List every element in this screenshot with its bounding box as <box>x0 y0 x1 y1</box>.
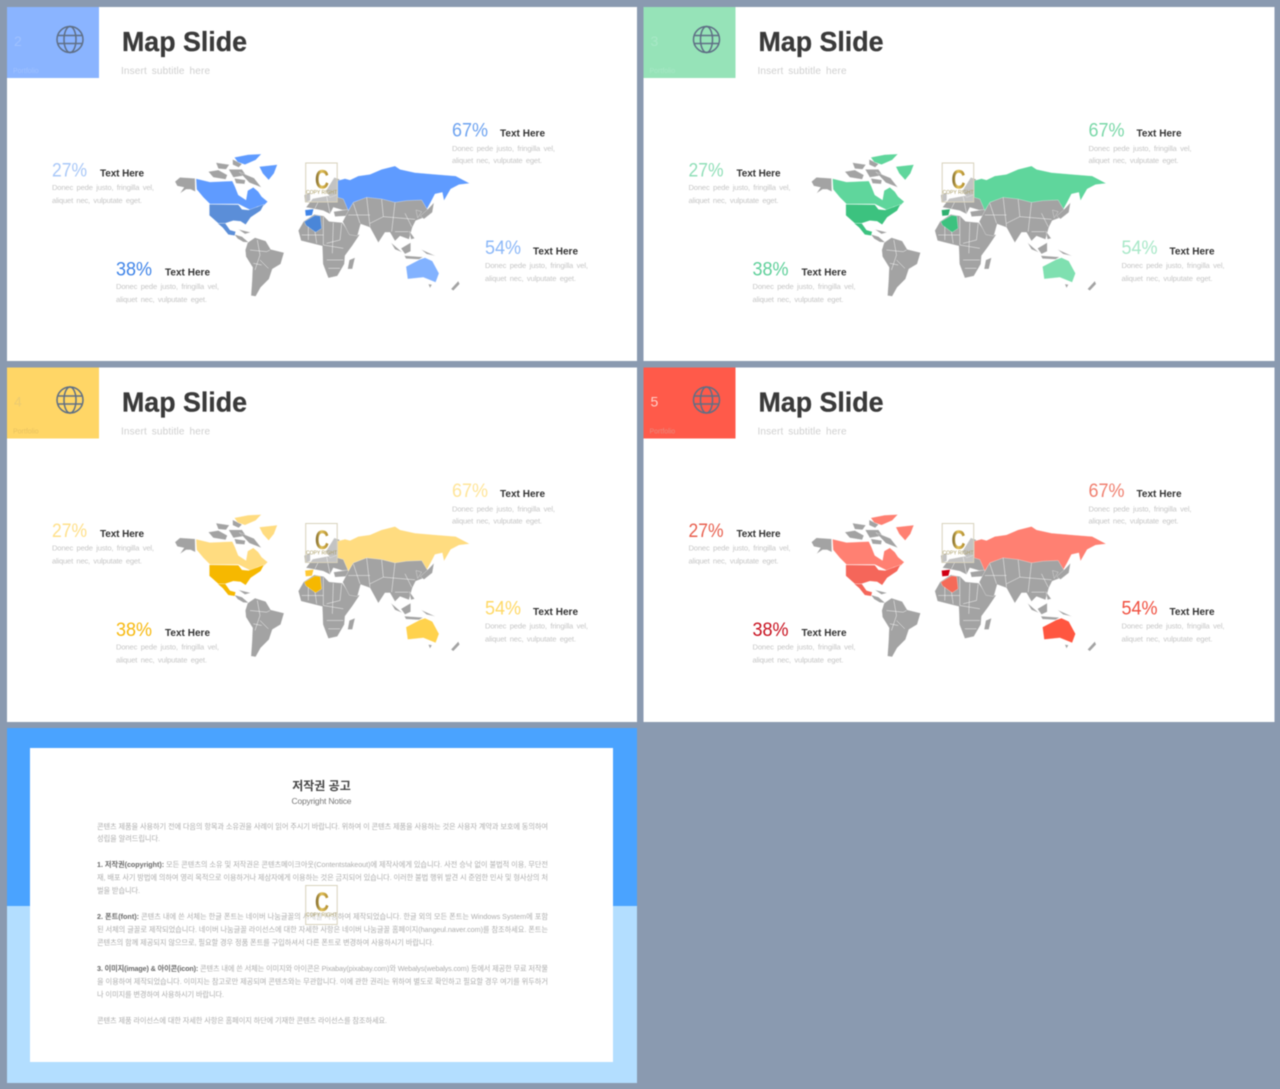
clause 3 image and icon: 3. 이미지(image) & 아이콘(icon): 콘텐츠 내에 쓴 서체는 이미지와 아이콘은 Pixabay(pixabay.com)와 Webalys(webalys.com) 등에서 제공한 무료 저작물 <box>97 964 548 973</box>
stat 54%: 54% <box>485 238 521 259</box>
stat 54%: aliquet nec, vulputate eget. <box>1122 634 1212 644</box>
subtitle: Insert subtitle here <box>121 66 210 77</box>
stat 67%: aliquet nec, vulputate eget. <box>452 516 542 526</box>
stat 38% <box>116 620 219 664</box>
stat 27%: Text Here <box>100 529 144 540</box>
stat 54% <box>1122 598 1224 644</box>
intro paragraph: 성립을 알려드립니다. <box>97 834 160 843</box>
stat 67%: Text Here <box>500 489 545 500</box>
copyright heading: 저작권 공고 <box>292 778 351 793</box>
header tab: 5 <box>650 394 658 410</box>
stat 67%: Donec pede justo, fringilla vel, <box>1088 504 1192 514</box>
stat 27% <box>688 521 790 566</box>
stat 27%: Text Here <box>736 168 781 180</box>
world map <box>175 154 470 296</box>
panel: copyright notice <box>7 728 637 1083</box>
stat 38%: Donec pede justo, fringilla vel, <box>752 282 856 291</box>
stat 27%: 27% <box>52 160 87 182</box>
stat 38%: Text Here <box>802 628 847 639</box>
stat 27%: 27% <box>688 521 724 542</box>
world map <box>811 514 1106 657</box>
subtitle: Insert subtitle here <box>758 426 847 438</box>
stat 54%: 54% <box>1122 598 1158 620</box>
world map <box>175 514 470 657</box>
panel: slide 4 yellow map <box>7 368 637 722</box>
stat 27% <box>52 521 154 566</box>
header tab <box>644 7 736 78</box>
stat 38% <box>752 620 856 664</box>
world map <box>811 154 1106 296</box>
stat 27%: 27% <box>688 160 724 182</box>
stat 27%: aliquet nec, vulputate eget. <box>52 556 142 566</box>
stat 54%: Donec pede justo, fringilla vel, <box>485 622 588 630</box>
clause 1 copyright: 1. 저작권(copyright): 모든 콘텐츠의 소유 및 저작권은 콘텐츠메이크아웃(Contentstakeout)에 제작사에게 있습니다. 사전 승낙 없이 불법적 이용, 무단전 <box>97 860 548 869</box>
watermark <box>306 524 337 562</box>
stat 67%: Text Here <box>1136 489 1182 500</box>
stat 38%: aliquet nec, vulputate eget. <box>752 295 844 304</box>
heading: Map Slide <box>758 386 884 418</box>
clause 3 image and icon: 나 이미지를 변경하여 사용하시기 바랍니다. <box>97 990 224 999</box>
stat 27%: aliquet nec, vulputate eget. <box>688 196 778 205</box>
intro paragraph <box>97 822 548 843</box>
icon: globe <box>57 26 83 52</box>
header tab: Portfolio <box>13 68 39 75</box>
stat 67%: Donec pede justo, fringilla vel, <box>1088 144 1192 153</box>
stat 67% <box>1088 120 1192 165</box>
watermark <box>942 524 974 562</box>
stat 54%: Donec pede justo, fringilla vel, <box>1122 261 1224 270</box>
header tab: Portfolio <box>650 428 675 436</box>
heading: Map Slide <box>122 26 247 57</box>
stat 38%: Text Here <box>165 268 210 278</box>
icon: globe <box>57 387 83 413</box>
watermark <box>942 163 974 202</box>
watermark <box>306 163 337 202</box>
header tab: 2 <box>14 33 22 49</box>
stat 67% <box>452 481 555 526</box>
stat 54%: Text Here <box>1170 246 1215 258</box>
header tab: 4 <box>14 394 22 410</box>
stat 38%: Text Here <box>802 268 847 278</box>
clause 1 copyright <box>97 860 548 895</box>
stat 38%: Text Here <box>165 628 210 639</box>
stat 67%: 67% <box>452 481 488 502</box>
license note: 콘텐츠 제품 라이선스에 대한 자세한 사항은 홈페이지 하단에 기재한 콘텐츠 라이선스를 참조하세요. <box>97 1016 387 1025</box>
stat 27%: Donec pede justo, fringilla vel, <box>688 544 790 552</box>
stat 67%: Donec pede justo, fringilla vel, <box>452 504 555 514</box>
stat 54%: aliquet nec, vulputate eget. <box>485 274 576 283</box>
stat 67% <box>1088 481 1192 526</box>
header tab: 3 <box>650 33 658 49</box>
stat 27%: Text Here <box>736 529 781 540</box>
stat 67%: Donec pede justo, fringilla vel, <box>452 144 555 153</box>
clause 1 copyright: 재, 배포 사기 방법에 의하여 영리 목적으로 이용하거나 제삼자에게 이용하는 것은 금지되어 있습니다. 이러한 불법 행위 발견 시 준엄한 민사 및 형사상의 처 <box>97 873 548 882</box>
subtitle: Insert subtitle here <box>121 426 210 438</box>
stat 54%: Donec pede justo, fringilla vel, <box>1122 622 1224 630</box>
stat 38%: 38% <box>752 260 789 280</box>
stat 67%: Text Here <box>500 128 545 140</box>
clause 1 copyright: 벌을 받습니다. <box>97 886 140 895</box>
stat 38%: Donec pede justo, fringilla vel, <box>116 282 219 291</box>
watermark <box>306 886 337 924</box>
heading: Map Slide <box>122 386 247 418</box>
heading: Map Slide <box>758 26 884 57</box>
stat 67%: 67% <box>1088 481 1125 502</box>
header tab: Portfolio <box>650 68 675 75</box>
clause 2 font: 콘텐츠의 함께 제공되지 않으므로, 필요할 경우 정품 폰트를 구입하셔서 다른 폰트로 변경하여 사용하시기 바랍니다. <box>97 938 434 947</box>
stat 38%: Donec pede justo, fringilla vel, <box>116 642 219 652</box>
panel: slide 2 blue map <box>7 7 637 361</box>
stat 38%: aliquet nec, vulputate eget. <box>116 656 207 664</box>
stat 54%: aliquet nec, vulputate eget. <box>485 634 576 644</box>
stat 67% <box>452 120 555 165</box>
stat 38%: 38% <box>116 620 152 641</box>
stat 67%: 67% <box>452 120 488 142</box>
copyright heading: Copyright Notice <box>292 796 352 806</box>
stat 27%: Text Here <box>100 168 144 180</box>
panel: slide 3 green map <box>644 7 1274 361</box>
stat 54%: Text Here <box>533 607 578 618</box>
stat 67%: aliquet nec, vulputate eget. <box>452 156 542 165</box>
stat 67%: 67% <box>1088 120 1125 142</box>
stat 54% <box>485 238 588 283</box>
header tab <box>7 7 99 78</box>
stat 27%: Donec pede justo, fringilla vel, <box>52 183 154 192</box>
header tab: Portfolio <box>13 428 39 436</box>
stat 67%: Text Here <box>1136 128 1182 140</box>
stat 54%: Text Here <box>1170 607 1215 618</box>
copyright heading <box>292 778 352 806</box>
icon: globe <box>694 387 720 413</box>
stat 27%: Donec pede justo, fringilla vel, <box>688 183 790 192</box>
stat 54%: 54% <box>1122 238 1158 259</box>
stat 67%: aliquet nec, vulputate eget. <box>1088 156 1178 165</box>
stat 54%: Donec pede justo, fringilla vel, <box>485 261 588 270</box>
stat 54%: Text Here <box>533 246 578 258</box>
panel: slide 5 red map <box>644 368 1274 722</box>
intro paragraph: 콘텐츠 제품을 사용하기 전에 다음의 항목과 소유권을 사례이 읽어 주시기 바랍니다. 위하여 이 콘텐츠 제품을 사용하는 것은 사용자 계약과 보호에 동의하여 <box>97 822 548 831</box>
clause 2 font <box>97 912 548 947</box>
clause 3 image and icon: 을 이용하여 제작되었습니다. 이미지는 참고로만 제공되며 콘텐츠와는 무관합니다. 이에 관한 권리는 위하여 별도로 확인하고 필요할 경우 여기를 위두하거 <box>97 977 548 986</box>
stat 27%: Donec pede justo, fringilla vel, <box>52 544 154 552</box>
stat 38%: aliquet nec, vulputate eget. <box>752 656 844 664</box>
header tab <box>7 368 99 438</box>
stat 27% <box>52 160 154 205</box>
stat 38% <box>116 260 219 304</box>
stat 54%: aliquet nec, vulputate eget. <box>1122 274 1212 283</box>
clause 3 image and icon <box>97 964 548 999</box>
stat 38%: 38% <box>752 620 789 641</box>
stat 27%: aliquet nec, vulputate eget. <box>688 556 778 566</box>
clause 2 font: 된 서체의 글꼴로 제작되었습니다. 네이버 나눔글꼴 라이선스에 대한 자세한 사항은 네이버 나눔글꼴 홈페이지(hangeul.naver.com)를 참조하세요. 폰트는 <box>97 925 548 934</box>
stat 38%: aliquet nec, vulputate eget. <box>116 295 207 304</box>
subtitle: Insert subtitle here <box>758 66 847 77</box>
stat 38%: 38% <box>116 260 152 280</box>
stat 38% <box>752 260 856 304</box>
clause 2 font: 2. 폰트(font): 콘텐츠 내에 쓴 서체는 한글 폰트는 네이버 나눔글꼴의 서체를 사용하여 제작되었습니다. 한글 외의 모든 폰트는 Windows System에 포함 <box>97 912 548 921</box>
stat 27% <box>688 160 790 205</box>
stat 67%: aliquet nec, vulputate eget. <box>1088 516 1178 526</box>
stat 54%: 54% <box>485 598 521 620</box>
stat 27%: 27% <box>52 521 87 542</box>
stat 54% <box>1122 238 1224 283</box>
stat 54% <box>485 598 588 644</box>
icon: globe <box>694 26 720 52</box>
stat 38%: Donec pede justo, fringilla vel, <box>752 642 856 652</box>
stat 27%: aliquet nec, vulputate eget. <box>52 196 142 205</box>
header tab <box>644 368 736 438</box>
